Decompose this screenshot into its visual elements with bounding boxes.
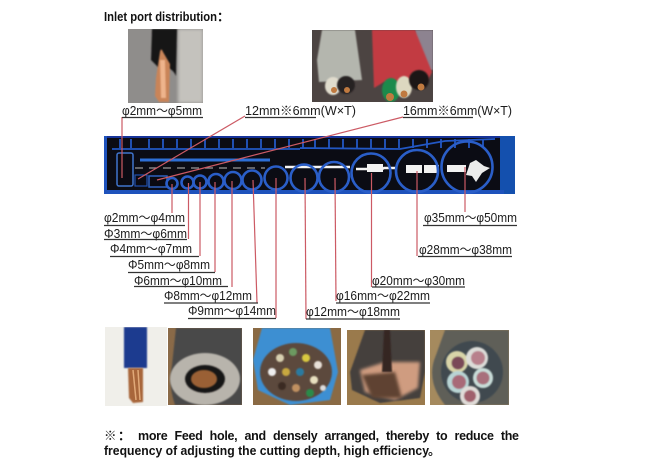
photo: flat grey and red cables bbox=[312, 30, 433, 102]
label: phi 3 to 6 mm: Φ3mm～φ6mm bbox=[104, 227, 187, 241]
photo: blue single core cable bbox=[105, 327, 167, 406]
photo: cable with exposed stranded copper bbox=[347, 330, 425, 405]
label: phi 2 to 5 mm: φ2mm～φ5mm bbox=[122, 104, 202, 118]
label: phi 35 to 50 mm: φ35mm～φ50mm bbox=[424, 211, 517, 225]
note text: ： bbox=[118, 429, 131, 443]
photo: cable with grey jacket and dark core bbox=[168, 328, 242, 405]
label: 16 by 6 mm: 16mm※6mm(W×T) bbox=[403, 104, 512, 118]
label: phi 5 to 8 mm: Φ5mm～φ8mm bbox=[128, 258, 210, 272]
label: phi 12 to 18 mm: φ12mm～φ18mm bbox=[306, 305, 400, 319]
photo: copper conductor with black sheath bbox=[128, 29, 203, 103]
note text: 。 bbox=[428, 444, 441, 458]
title: Inlet port distribution bbox=[104, 10, 217, 24]
note text: frequency of adjusting the cutting depth, high efficiency bbox=[104, 444, 429, 458]
photo: five core cable cross-section bbox=[430, 330, 509, 406]
label: phi 4 to 7 mm: Φ4mm～φ7mm bbox=[110, 242, 192, 256]
title colon: ： bbox=[217, 10, 230, 24]
label: phi 8 to 12 mm: Φ8mm～φ12mm bbox=[164, 289, 252, 303]
note text: more Feed hole, and densely arranged, thereby to reduce the bbox=[138, 429, 519, 443]
label: phi 6 to 10 mm: Φ6mm～φ10mm bbox=[134, 274, 222, 288]
label: phi 28 to 38 mm: φ28mm～φ38mm bbox=[419, 243, 512, 257]
note text: ※ bbox=[104, 429, 117, 443]
label: phi 2 to 4 mm: φ2mm～φ4mm bbox=[104, 211, 185, 225]
photo: blue multicore cable bbox=[253, 328, 341, 405]
label: phi 16 to 22 mm: φ16mm～φ22mm bbox=[336, 289, 430, 303]
label: phi 20 to 30 mm: φ20mm～φ30mm bbox=[372, 274, 465, 288]
leader lines bbox=[122, 116, 465, 319]
comb slots bbox=[120, 139, 483, 148]
round ports bbox=[166, 142, 492, 192]
note text bbox=[104, 429, 519, 458]
rectangular ports bbox=[117, 153, 133, 186]
white cutting slot bbox=[285, 167, 395, 170]
label: 12 by 6 mm: 12mm※6mm(W×T) bbox=[245, 104, 356, 118]
label: phi 9 to 14 mm: Φ9mm～φ14mm bbox=[188, 304, 276, 318]
panel: blue inlet port bar bbox=[104, 136, 515, 194]
